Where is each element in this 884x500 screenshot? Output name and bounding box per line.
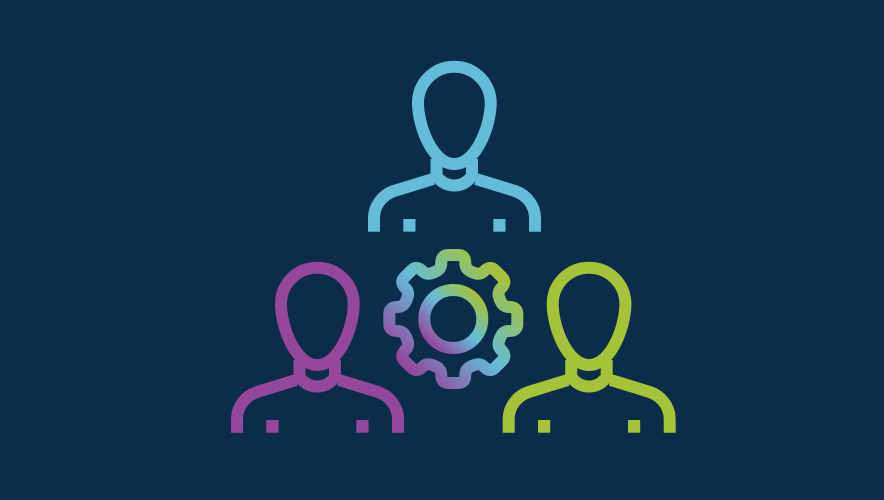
gear inner ring (424, 290, 482, 348)
icon: blue person (top) (374, 67, 535, 232)
icon: gradient gear (383, 249, 524, 389)
icon: green person (right) (509, 268, 670, 433)
icon: purple person (left) (237, 268, 398, 433)
gear outer teeth (383, 249, 524, 389)
